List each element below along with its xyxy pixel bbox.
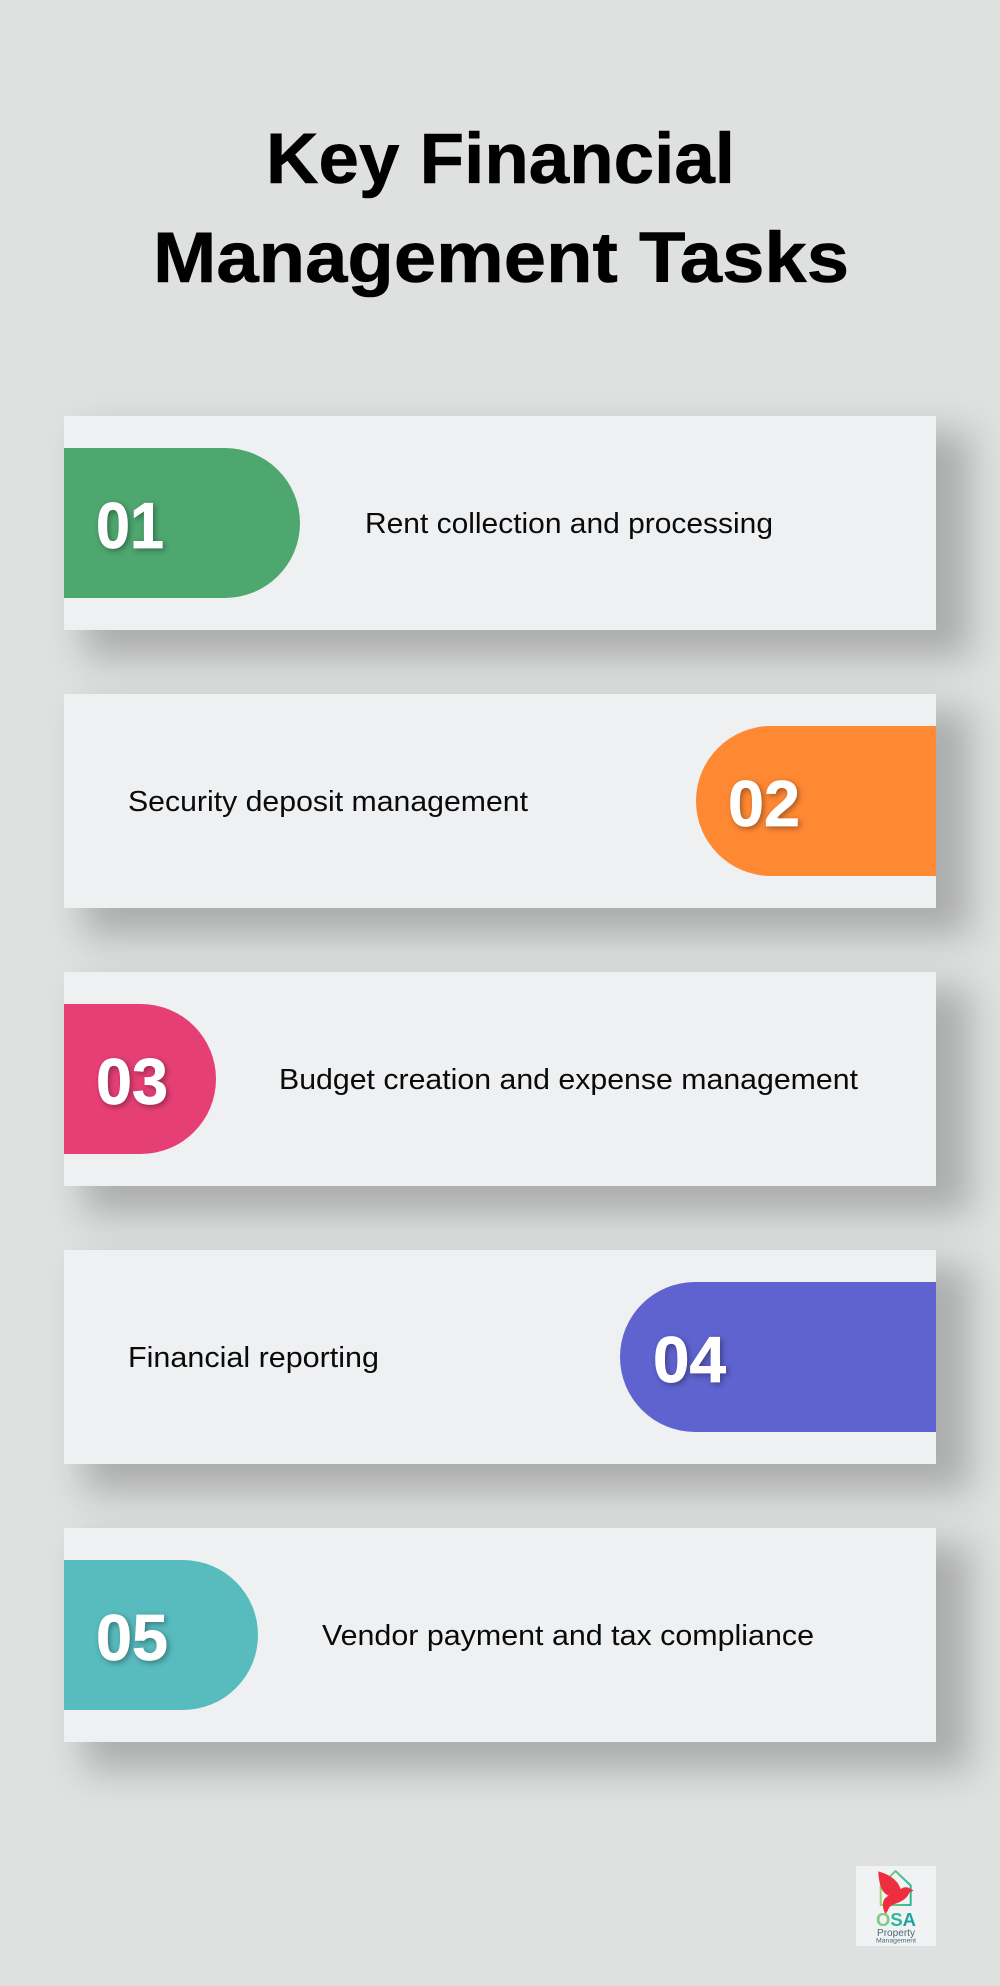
panel: task 03 [64, 972, 970, 1214]
number 02: 02 [728, 767, 800, 840]
logo: OSA Property Management [856, 1866, 936, 1946]
logo wordmark: OSA [876, 1909, 916, 1930]
panel: task 02 [64, 694, 970, 936]
title [153, 120, 849, 298]
icon: house outline [881, 1871, 911, 1905]
number 03: 03 [96, 1045, 168, 1118]
orange number pill [696, 726, 936, 876]
title: Key Financial [266, 120, 735, 199]
task text: Budget creation and expense management [279, 1064, 858, 1096]
logo artwork [876, 1871, 916, 1944]
panel: task 04 [64, 1250, 970, 1492]
logo subtitle second line: Management [876, 1938, 916, 1944]
green number pill [64, 448, 300, 598]
icon: red bird [878, 1871, 914, 1914]
task text: Rent collection and processing [365, 508, 773, 540]
panel: task 01 [64, 416, 970, 658]
task text: Security deposit management [128, 786, 528, 818]
task text: Vendor payment and tax compliance [322, 1620, 814, 1652]
number 01: 01 [96, 489, 164, 562]
pink number pill [64, 1004, 216, 1154]
number 05: 05 [96, 1601, 168, 1674]
teal number pill [64, 1560, 258, 1710]
title: Management Tasks [153, 219, 849, 298]
logo subtitle: Property [877, 1928, 915, 1939]
task text: Financial reporting [128, 1342, 379, 1374]
number 04: 04 [653, 1323, 726, 1396]
purple number pill [620, 1282, 936, 1432]
panel: task 05 [64, 1528, 970, 1770]
